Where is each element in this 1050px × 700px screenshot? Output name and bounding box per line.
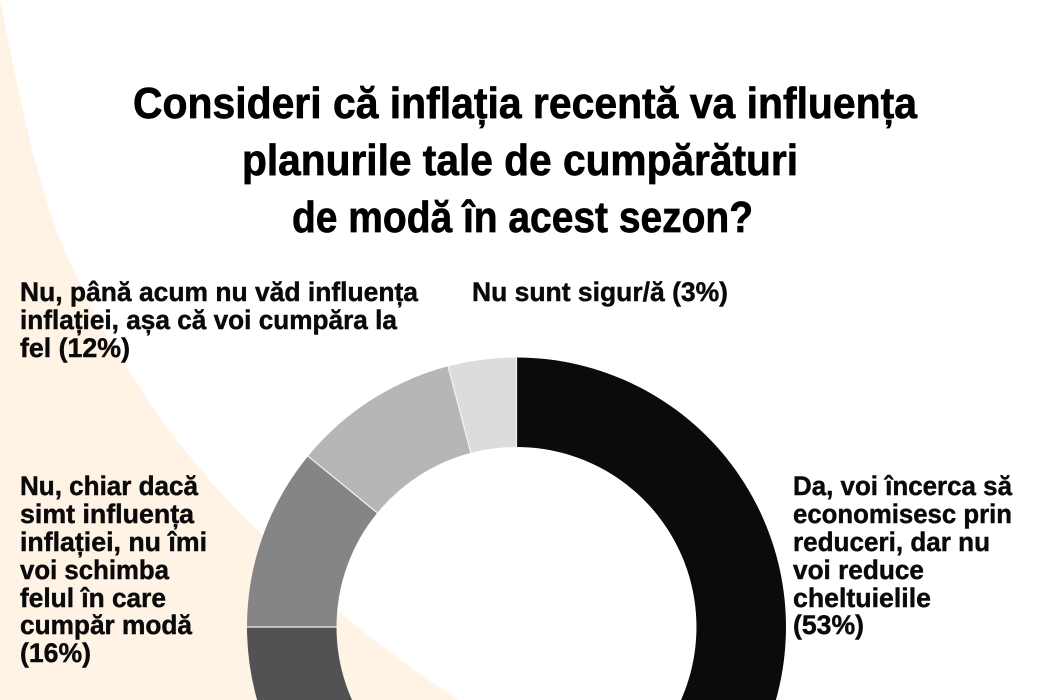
label: Nu, chiar dacă 16%: (16%) bbox=[20, 638, 91, 668]
title: de modă în acest sezon? bbox=[292, 193, 753, 242]
label: Nu, chiar dacă 16%: voi schimba bbox=[20, 555, 170, 585]
label: Da 53%: cheltuielile bbox=[793, 583, 931, 613]
label: Nu, până acum 12%: inflației, așa că voi cumpăra la bbox=[20, 305, 398, 335]
label: Nu sunt sigur 3%: Nu sunt sigur/ă (3%) bbox=[472, 277, 728, 307]
label: Da 53%: (53%) bbox=[793, 610, 864, 640]
segment: 16% dark gray bbox=[247, 627, 352, 700]
label: Nu, chiar dacă 16%: cumpăr modă bbox=[20, 610, 193, 640]
label: Nu, chiar dacă 16%: Nu, chiar dacă bbox=[20, 471, 199, 501]
label: Nu, chiar dacă 16%: felul în care bbox=[20, 583, 166, 613]
label: Da 53%: voi reduce bbox=[793, 555, 924, 585]
label: Da 53% bbox=[793, 471, 1013, 640]
label: Da 53%: reduceri, dar nu bbox=[793, 527, 990, 557]
title bbox=[133, 79, 917, 242]
segment: Da 53% bbox=[516, 358, 786, 700]
title: Consideri că inflația recentă va influența bbox=[133, 79, 917, 128]
segment: Nu, chiar dacă 16% bbox=[247, 456, 377, 627]
label: Da 53%: economisesc prin bbox=[793, 499, 1012, 529]
segment: Nu, până acum 12% bbox=[308, 366, 471, 513]
donut chart bbox=[247, 358, 786, 700]
label: Nu, până acum 12% bbox=[20, 277, 419, 363]
label: Nu, chiar dacă 16%: simt influența bbox=[20, 499, 195, 529]
label: Nu, chiar dacă 16% bbox=[20, 471, 207, 668]
segment: Nu sunt sigur 3% bbox=[448, 358, 516, 453]
label: Nu, până acum 12%: fel (12%) bbox=[20, 333, 130, 363]
title: planurile tale de cumpărături bbox=[242, 136, 798, 185]
background: cream curved shape bbox=[0, 0, 458, 700]
label: Nu, până acum 12%: Nu, până acum nu văd influența bbox=[20, 277, 419, 307]
label: Da 53%: Da, voi încerca să bbox=[793, 471, 1013, 501]
label: Nu, chiar dacă 16%: inflației, nu îmi bbox=[20, 527, 207, 557]
